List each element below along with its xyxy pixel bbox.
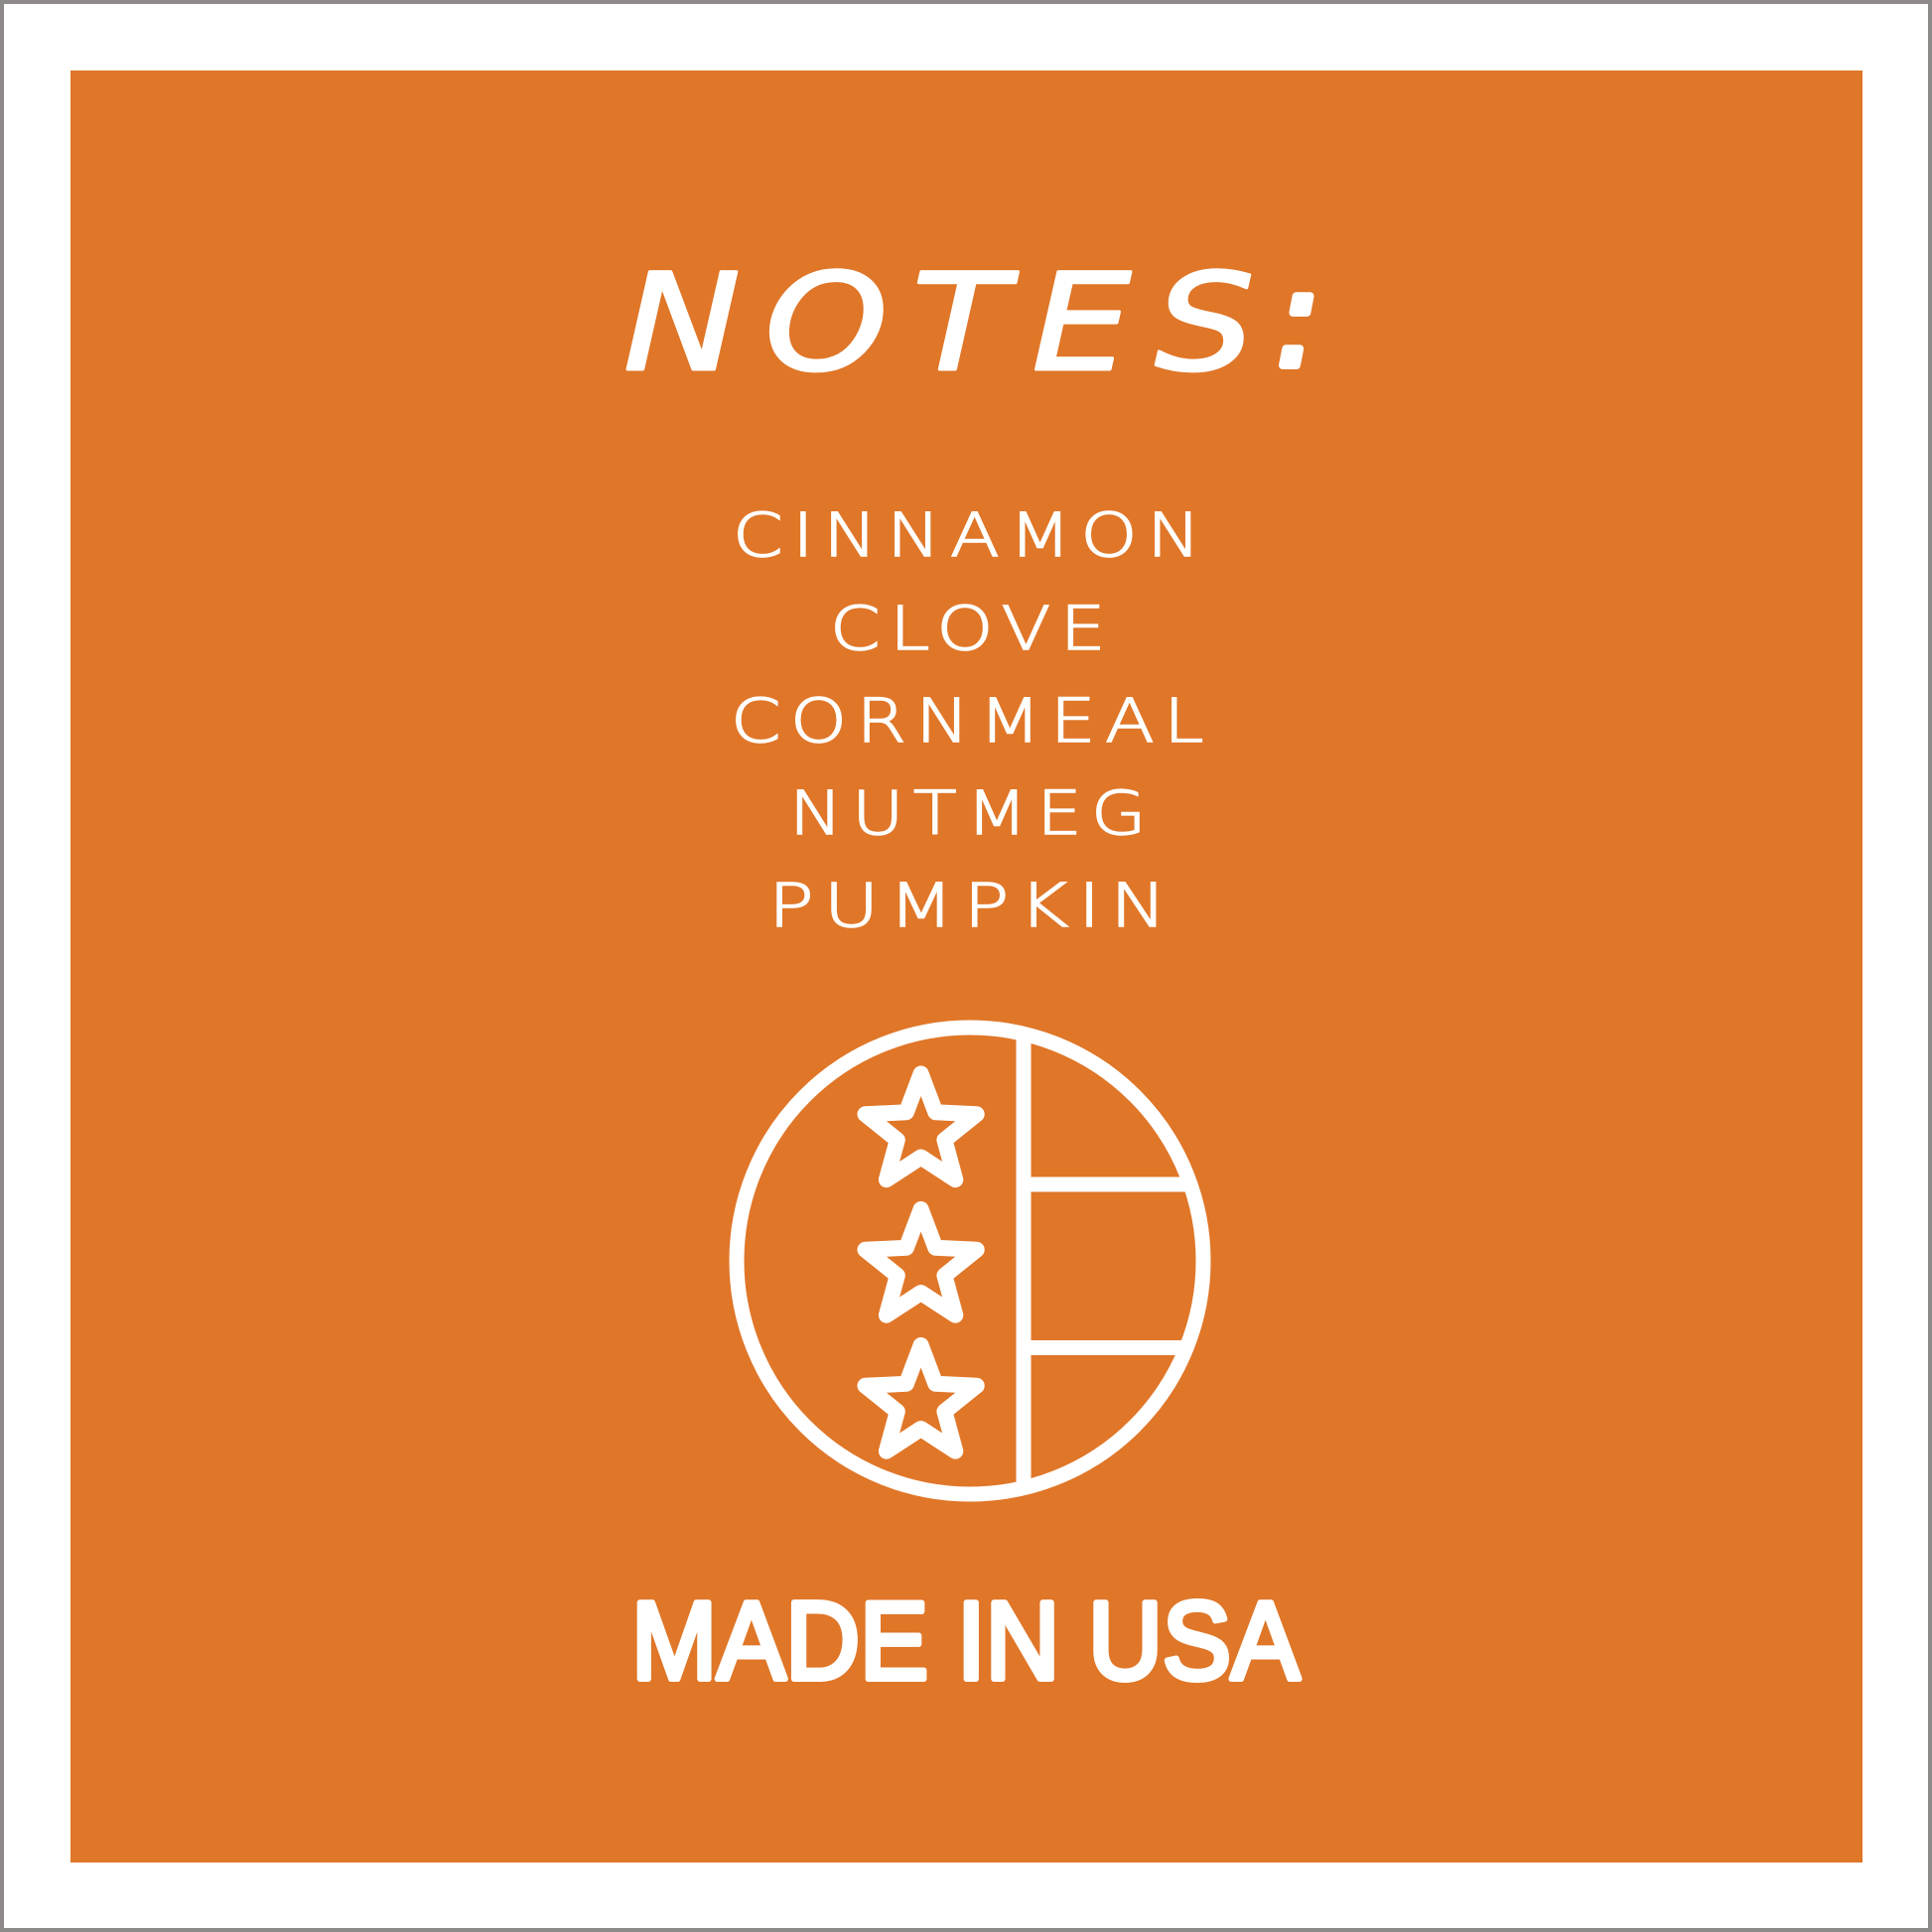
- ingredient: clove: CLOVE: [830, 594, 1115, 664]
- made in usa label: MADE IN USA: [631, 1580, 1300, 1703]
- flag divider and stripes: [1024, 1033, 1190, 1488]
- ingredient: cinnamon: CINNAMON: [733, 500, 1210, 571]
- heading: notes: :: [1276, 241, 1320, 397]
- ingredient: cornmeal: CORNMEAL: [731, 686, 1213, 757]
- circle outline: [737, 1028, 1203, 1494]
- ingredient: pumpkin: PUMPKIN: [768, 871, 1176, 941]
- star 1: [866, 1074, 977, 1179]
- star 2: [866, 1209, 977, 1315]
- ingredient list: [731, 500, 1213, 941]
- star 3: [866, 1345, 977, 1451]
- ingredient: nutmeg: NUTMEG: [789, 778, 1156, 849]
- heading: notes: NOTES: [623, 245, 1279, 401]
- icon: american flag globe: [737, 1028, 1203, 1494]
